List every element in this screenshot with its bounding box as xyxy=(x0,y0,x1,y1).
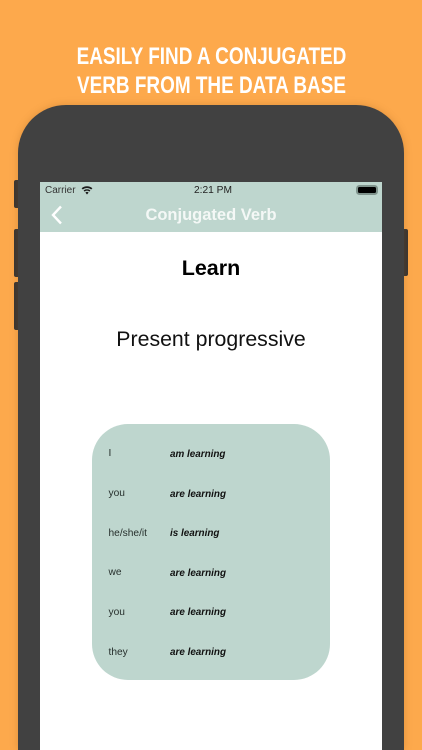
row: they: they xyxy=(108,647,128,658)
icon: battery xyxy=(356,185,378,195)
clock: 2:21 PM xyxy=(194,185,232,196)
row: we xyxy=(108,567,226,579)
row: I: I xyxy=(108,448,111,459)
side button: volume down xyxy=(14,282,20,330)
icon: back chevron xyxy=(52,206,62,224)
side button: mute xyxy=(14,180,20,208)
row: he/she/it: he/she/it xyxy=(108,528,147,539)
verb heading: Learn xyxy=(182,256,240,280)
row: he/she/it: is learning xyxy=(170,528,219,539)
carrier label: Carrier xyxy=(45,185,76,196)
row: you xyxy=(108,488,226,500)
row: you: you xyxy=(108,488,125,499)
row: he/she/it xyxy=(108,528,220,539)
row: I: am learning xyxy=(170,449,225,460)
row: you: are learning xyxy=(170,489,226,500)
row: you plural: you xyxy=(108,607,125,618)
tense heading: Present progressive xyxy=(116,327,306,351)
screen xyxy=(40,182,382,750)
icon: wifi xyxy=(82,186,92,194)
row: you plural: are learning xyxy=(170,607,226,618)
title: VERB FROM THE DATA BASE xyxy=(76,72,345,98)
row: we: we xyxy=(108,567,122,578)
nav title: Conjugated Verb xyxy=(145,206,277,224)
row: I xyxy=(108,448,226,460)
navigation bar xyxy=(40,182,382,232)
side button: power xyxy=(402,229,408,276)
conjugation panel xyxy=(92,424,330,680)
row: they xyxy=(108,647,226,658)
side button: volume up xyxy=(14,229,20,277)
title: EASILY FIND A CONJUGATED xyxy=(76,42,346,70)
row: they: are learning xyxy=(170,647,226,658)
phone body xyxy=(18,105,404,750)
row: we: are learning xyxy=(170,568,226,579)
row: you plural xyxy=(108,607,226,618)
title xyxy=(76,42,346,98)
